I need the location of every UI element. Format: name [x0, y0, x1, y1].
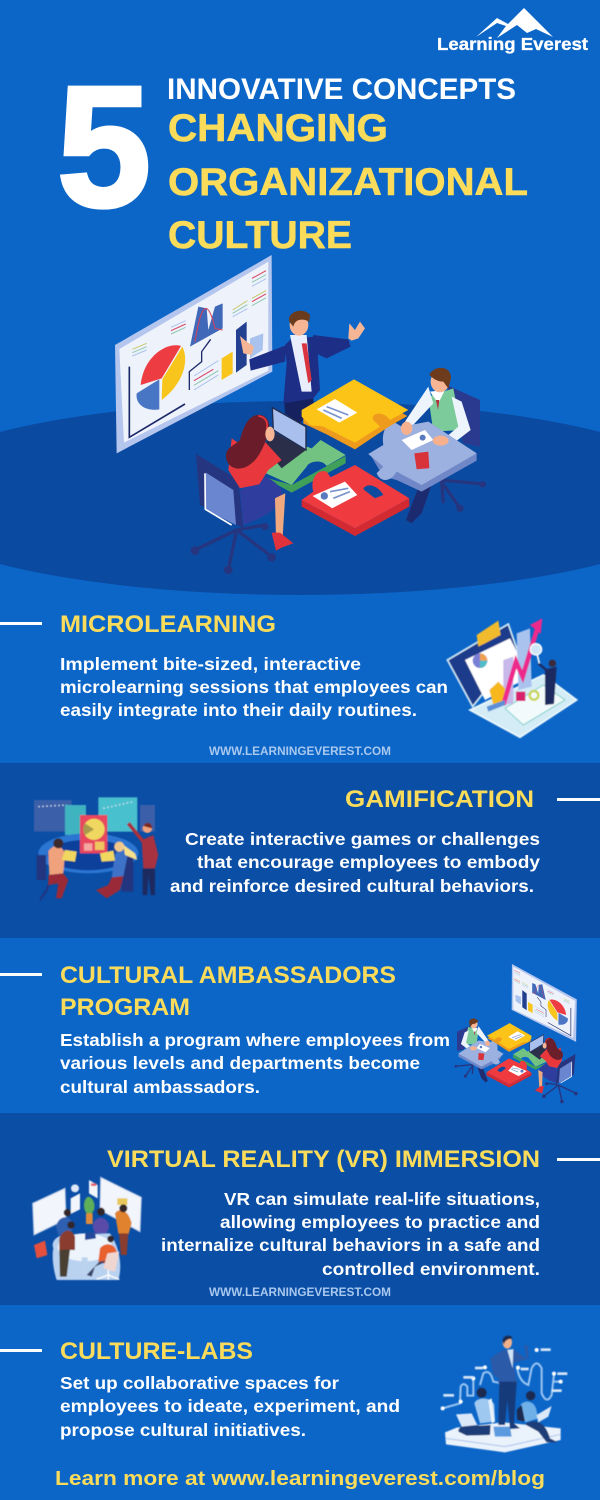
watermark: WWW.LEARNINGEVEREST.COM — [209, 746, 391, 758]
body text: Create interactive games or challenges — [185, 829, 540, 849]
section: gamification — [34, 786, 600, 900]
body text: Set up collaborative spaces for — [60, 1373, 339, 1393]
standing presenter — [240, 311, 365, 423]
heading: MICROLEARNING — [60, 611, 276, 638]
heading: GAMIFICATION — [345, 786, 534, 813]
presentation board — [115, 255, 272, 453]
icon: leader and colleagues on paper stack — [441, 1336, 567, 1452]
body text: propose cultural initiatives. — [60, 1420, 306, 1440]
hero ellipse — [0, 401, 600, 595]
accent line — [0, 622, 42, 625]
icon: laptop with charts and analyst — [447, 618, 577, 737]
body text: allowing employees to practice and — [220, 1212, 540, 1232]
seated team and puzzle pieces — [191, 368, 486, 574]
title: CULTURE — [168, 214, 352, 257]
dark band: gamification — [0, 763, 600, 938]
title — [167, 73, 528, 257]
section: culture-labs — [0, 1336, 567, 1452]
body text: microlearning sessions that employees can — [60, 677, 448, 697]
body text — [170, 829, 540, 896]
title: INNOVATIVE CONCEPTS — [167, 73, 516, 106]
body text: controlled environment. — [322, 1259, 540, 1279]
logo: Learning Everest: Learning Everest — [437, 34, 588, 54]
body text: various levels and departments become — [60, 1053, 420, 1073]
section: microlearning — [0, 611, 577, 737]
body text: VR can simulate real-life situations, — [224, 1189, 540, 1209]
body text: and reinforce desired cultural behaviors. — [170, 876, 534, 896]
section: virtual reality immersion — [33, 1146, 600, 1280]
footer call to action: Learn more at www.learningeverest.com/blog — [55, 1467, 545, 1490]
body text — [60, 1030, 450, 1097]
icon: team collaborating at round table — [33, 1177, 141, 1280]
heading: VIRTUAL REALITY (VR) IMMERSION — [107, 1146, 540, 1173]
body text: easily integrate into their daily routines. — [60, 700, 417, 720]
hero illustration: team meeting around puzzle tables — [115, 255, 486, 574]
logo: Learning Everest — [437, 8, 588, 54]
heading: PROGRAM — [60, 994, 190, 1021]
body text: internalize cultural behaviors in a safe and — [161, 1235, 540, 1255]
body text — [60, 1373, 400, 1440]
title number 5: 5 — [57, 51, 151, 243]
body text: cultural ambassadors. — [60, 1077, 260, 1097]
accent line — [0, 1349, 42, 1352]
accent line — [557, 1158, 600, 1161]
watermark: WWW.LEARNINGEVEREST.COM — [209, 1287, 391, 1299]
body text: Establish a program where employees from — [60, 1030, 450, 1050]
section: cultural ambassadors program — [0, 962, 578, 1103]
accent line — [0, 973, 42, 976]
dark band: virtual reality — [0, 1113, 600, 1305]
body text: Implement bite-sized, interactive — [60, 654, 361, 674]
body text: employees to ideate, experiment, and — [60, 1396, 400, 1416]
heading: CULTURE-LABS — [60, 1338, 253, 1365]
body text — [60, 654, 448, 720]
body text — [161, 1189, 540, 1279]
title: ORGANIZATIONAL — [168, 161, 528, 204]
body text: that encourage employees to embody — [197, 852, 540, 872]
icon: mirrored team and board — [455, 964, 578, 1103]
accent line — [557, 798, 600, 801]
icon: team at round table with data screens — [34, 797, 158, 900]
heading: CULTURAL AMBASSADORS — [60, 962, 396, 989]
heading — [60, 962, 396, 1021]
title: CHANGING — [168, 107, 388, 150]
